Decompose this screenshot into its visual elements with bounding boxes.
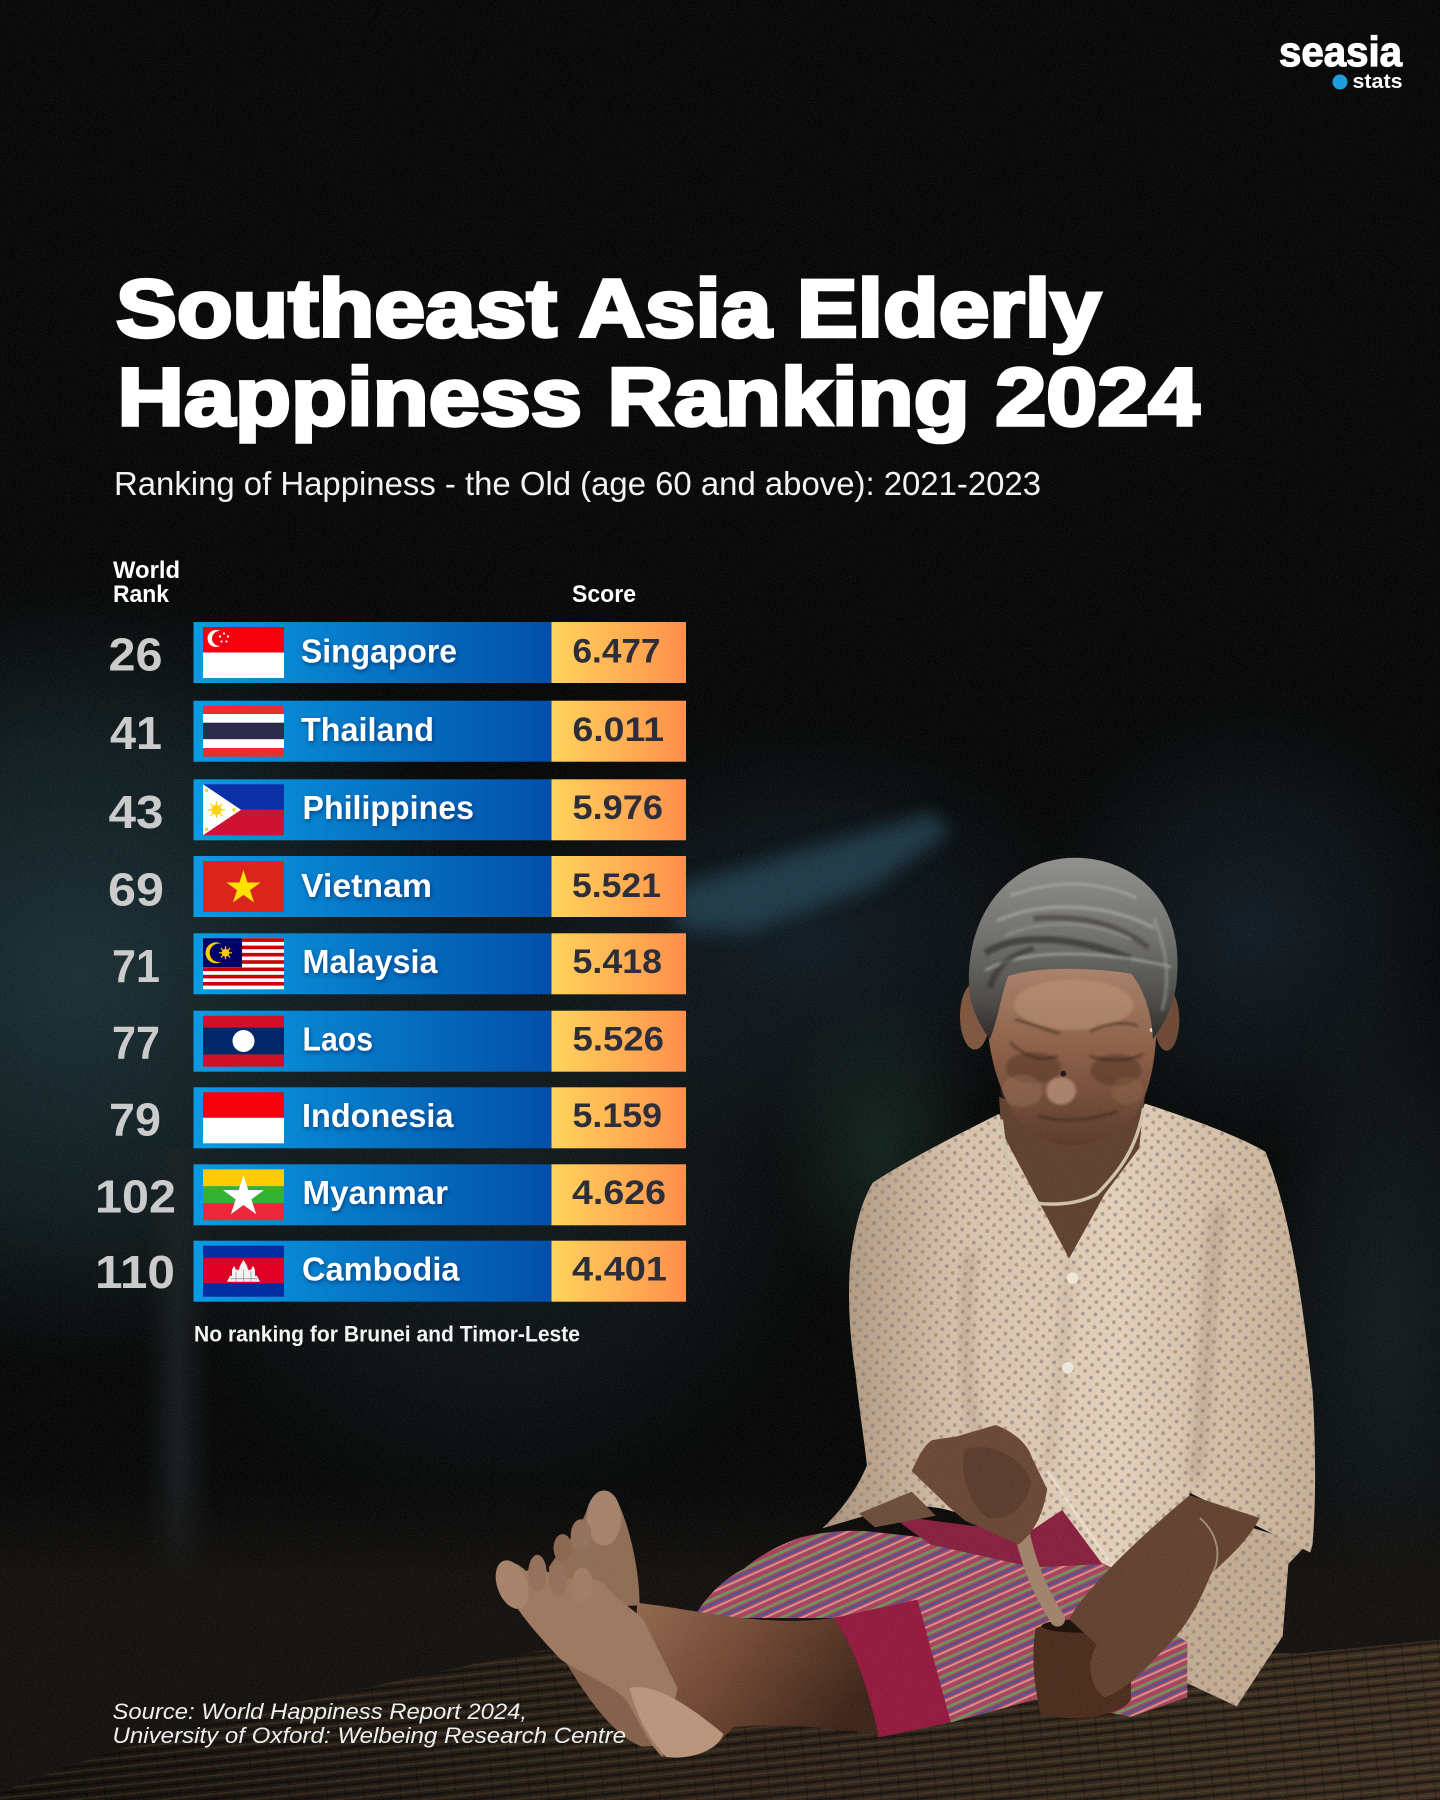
row: Myanmar: 102 [95, 1170, 176, 1222]
red trouser cuff [834, 1600, 951, 1737]
row: Myanmar [95, 1164, 686, 1225]
near foot sole and toes [489, 1555, 723, 1758]
ranking table [95, 622, 686, 1302]
logo: seasia stats: seasia [1279, 28, 1403, 75]
face shading [1001, 979, 1144, 1107]
flag: Cambodia [203, 1246, 284, 1297]
flag: Thailand [203, 706, 284, 757]
shirt [822, 1104, 1315, 1569]
shirt buttons [1062, 1272, 1078, 1373]
flag: Singapore [203, 627, 284, 678]
hair [969, 858, 1178, 1039]
row: Malaysia: 5.418 [572, 943, 662, 981]
bowl [1033, 1619, 1131, 1718]
row: Cambodia: 4.401 [572, 1250, 667, 1288]
title: Southeast Asia Elderly [116, 264, 1101, 354]
right arm and hand [1069, 1495, 1260, 1697]
row: Thailand [110, 701, 686, 762]
row: Laos: 5.526 [572, 1020, 664, 1058]
row: Laos: 77 [112, 1016, 160, 1068]
row: Myanmar: 4.626 [572, 1174, 666, 1212]
row: Cambodia: Cambodia [302, 1250, 460, 1288]
head [960, 858, 1179, 1145]
subtitle: Ranking of Happiness - the Old (age 60 and above): 2021-2023 [114, 466, 1041, 503]
flag: Laos [203, 1016, 284, 1067]
logo: seasia stats: stats [1352, 71, 1402, 93]
row: Singapore: 6.477 [572, 632, 660, 670]
flag: Philippines [203, 784, 284, 835]
row: Philippines [108, 779, 686, 840]
wooden pestle [1021, 1527, 1058, 1619]
row: Vietnam [108, 856, 686, 917]
lower leg [632, 1603, 878, 1757]
flag: Vietnam [203, 861, 284, 912]
row: Indonesia: 5.159 [572, 1097, 662, 1135]
source note [112, 1699, 626, 1748]
footnote: No ranking for Brunei and Timor-Leste [194, 1322, 580, 1346]
title [116, 264, 1200, 443]
row: Singapore [108, 622, 686, 683]
column heading: world rank: World [113, 557, 180, 584]
face [987, 962, 1156, 1145]
pants [694, 1510, 1187, 1722]
row: Cambodia [95, 1241, 686, 1302]
row: Indonesia [109, 1087, 686, 1148]
row: Vietnam: 5.521 [572, 867, 661, 905]
cloth scrap [859, 1492, 936, 1527]
row: Malaysia [112, 933, 686, 994]
eyes, mole and mouth [1011, 1020, 1143, 1120]
column heading: world rank: Rank [113, 581, 169, 608]
row: Laos [112, 1011, 686, 1072]
far foot heel [551, 1636, 666, 1747]
column heading: score: Score [572, 581, 636, 608]
flag: Myanmar [203, 1169, 284, 1220]
woman [489, 858, 1315, 1758]
row: Malaysia: Malaysia [302, 943, 438, 980]
source note: Source: World Happiness Report 2024, [112, 1699, 527, 1724]
row: Vietnam: 69 [108, 864, 164, 916]
logo mark [1332, 74, 1348, 90]
neck and chest [999, 1085, 1146, 1259]
row: Singapore: 26 [108, 628, 162, 680]
shirt lower back panel [1173, 1507, 1307, 1706]
row: Indonesia: 79 [109, 1094, 161, 1146]
row: Thailand: Thailand [301, 711, 434, 748]
row: Philippines: 5.976 [572, 789, 663, 827]
necklace [1001, 1108, 1144, 1204]
row: Philippines: Philippines [302, 789, 474, 826]
row: Malaysia: 71 [112, 940, 160, 992]
row: Cambodia: 110 [95, 1246, 175, 1298]
title: Happiness Ranking 2024 [118, 352, 1200, 443]
row: Thailand: 6.011 [572, 711, 664, 749]
column heading: world rank [113, 557, 180, 608]
hair strands [985, 884, 1171, 1011]
row: Indonesia: Indonesia [302, 1097, 454, 1134]
flag: Malaysia [203, 938, 284, 989]
row: Vietnam: Vietnam [301, 867, 432, 904]
ears [960, 983, 990, 1050]
upper foot and toes [549, 1490, 640, 1608]
row: Laos: Laos [302, 1020, 373, 1058]
source note: University of Oxford: Welbeing Research Centre [112, 1723, 626, 1748]
left forearm and hand [912, 1425, 1047, 1544]
row: Philippines: 43 [108, 786, 164, 838]
woven mat [0, 1640, 1440, 1800]
flag: Indonesia [203, 1092, 284, 1143]
row: Myanmar: Myanmar [302, 1174, 448, 1211]
earring [1150, 1028, 1154, 1032]
row: Singapore: Singapore [301, 632, 457, 670]
row: Thailand: 41 [110, 707, 162, 759]
